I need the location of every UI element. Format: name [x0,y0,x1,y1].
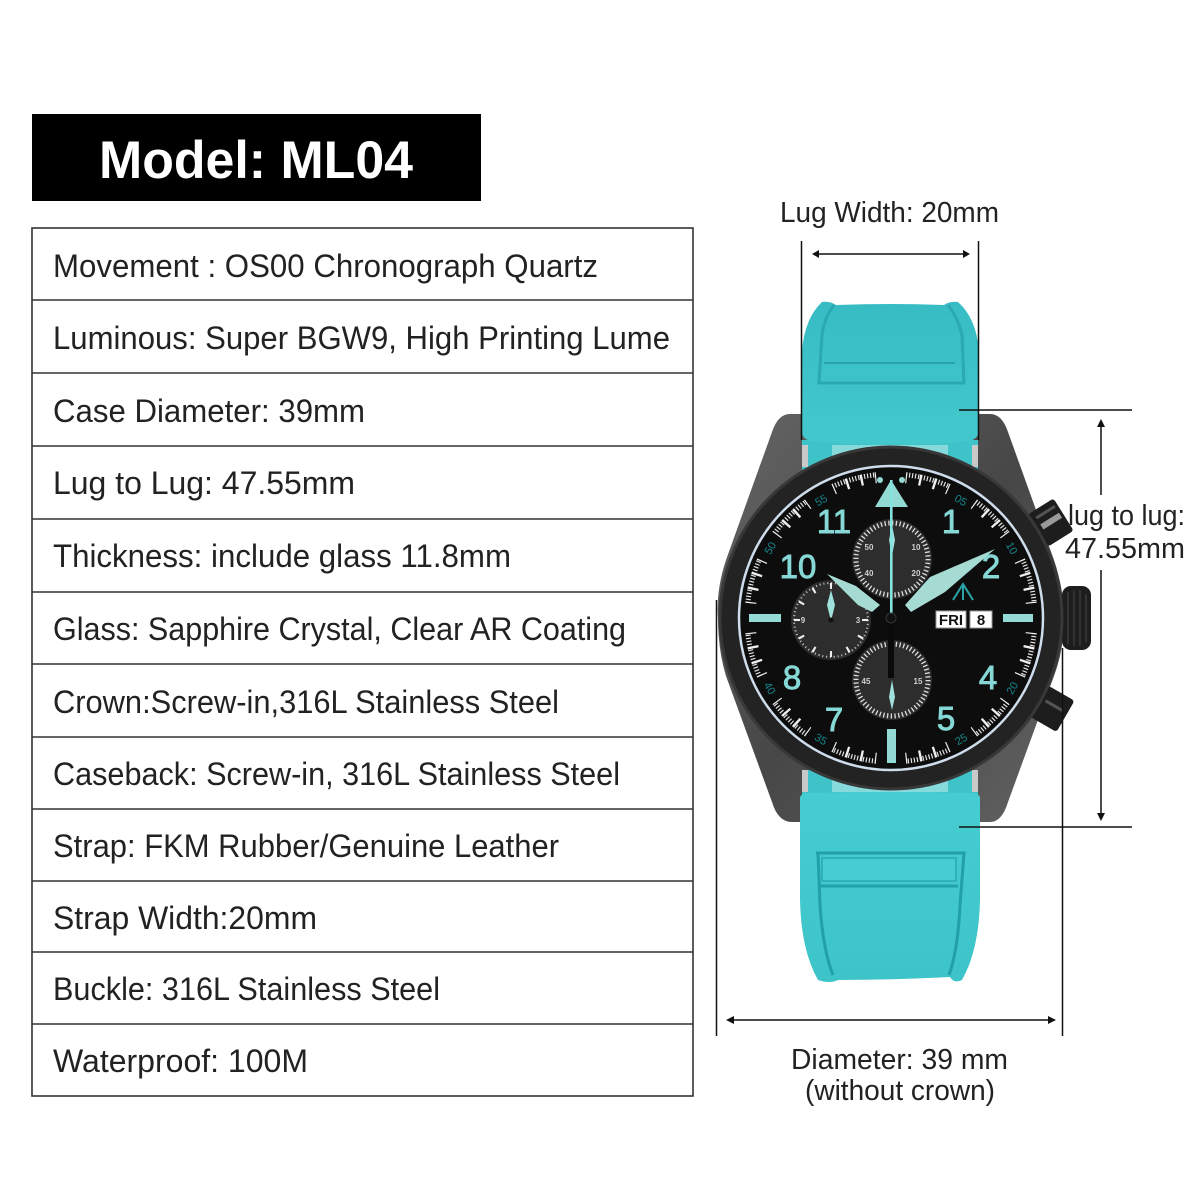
sub-dial bottom: 45 [862,677,871,686]
spec: caseback: Caseback: Screw-in, 316L Stainless Steel [53,756,620,792]
dimension: lug to lug: lug to lug: [1068,500,1185,532]
sub-dial bottom [852,640,932,720]
minute track numbers: 10 [1003,540,1019,557]
sub-dial top [852,519,932,599]
dimension: diameter: Diameter: 39 mm [791,1044,1008,1076]
bezel [720,447,1062,789]
minute hand [905,549,995,612]
sub-dial left: 3 [856,616,861,625]
spec: strap: Strap: FKM Rubber/Genuine Leather [53,828,559,864]
spec: luminous: Luminous: Super BGW9, High Printing Lume [53,320,670,356]
spec: buckle: Buckle: 316L Stainless Steel [53,971,440,1007]
dimension: lug to lug: 47.55mm [1065,533,1185,565]
spec: lug to lug: Lug to Lug: 47.55mm [53,465,355,501]
second hand [890,480,893,618]
sub-dial top: 50 [865,543,874,552]
spec: movement: Movement : OS00 Chronograph Quartz [53,248,598,284]
dial [739,466,1043,770]
numerals: 11 [817,503,851,540]
minute track numbers [761,493,1021,748]
dial logo [953,584,973,600]
sub-dial top: 20 [912,569,921,578]
numerals: 8 [783,659,801,696]
day and date window: FRI [939,612,963,629]
watch case with lugs [718,414,1064,822]
minute track numbers: 40 [761,680,777,697]
dimension: lug to lug [959,410,1185,827]
centre pin [886,613,896,623]
top strap [802,302,979,444]
hour markers [749,477,1033,763]
chronograph hand lower [888,618,894,678]
numerals: 1 [942,503,960,540]
watch illustration [718,302,1091,982]
numerals [780,503,1000,738]
spec: crown: Crown:Screw-in,316L Stainless Steel [53,684,559,720]
bottom strap [800,792,980,982]
numerals: 2 [982,548,1000,585]
spec: glass: Glass: Sapphire Crystal, Clear AR Coating [53,611,626,647]
spec: strap width: Strap Width:20mm [53,900,317,936]
spring bar area [802,440,978,800]
sub-dial top: 10 [912,543,921,552]
title banner: Model: ML04 [99,131,414,190]
specification table [32,228,693,1096]
title banner [32,114,481,201]
hour hand [827,574,880,612]
dimension: lug width [780,197,999,440]
day and date window: 8 [977,612,985,629]
minute track numbers: 25 [953,732,970,748]
spec: case diameter: Case Diameter: 39mm [53,393,365,429]
dimension: lug width: Lug Width: 20mm [780,197,999,229]
numerals: 10 [780,548,816,585]
numerals: 7 [825,701,843,738]
minute track numbers: 20 [1005,680,1021,697]
spec: waterproof: Waterproof: 100M [53,1043,308,1079]
dimension: diameter [716,600,1062,1107]
spec: thickness: Thickness: include glass 11.8mm [53,538,511,574]
sub-dial left [791,580,871,660]
numerals: 4 [979,659,997,696]
minute track numbers: 35 [812,732,829,748]
pushers and crown [1028,498,1091,732]
minute track numbers: 05 [952,493,969,509]
minute track numbers: 55 [813,493,830,509]
dimension: diameter: (without crown) [805,1075,995,1107]
sub-dial bottom: 15 [914,677,923,686]
numerals: 5 [937,700,955,737]
sub-dial left: 9 [801,616,806,625]
day and date window [936,611,992,629]
minute track numbers: 50 [763,540,779,557]
sub-dial top: 40 [865,569,874,578]
